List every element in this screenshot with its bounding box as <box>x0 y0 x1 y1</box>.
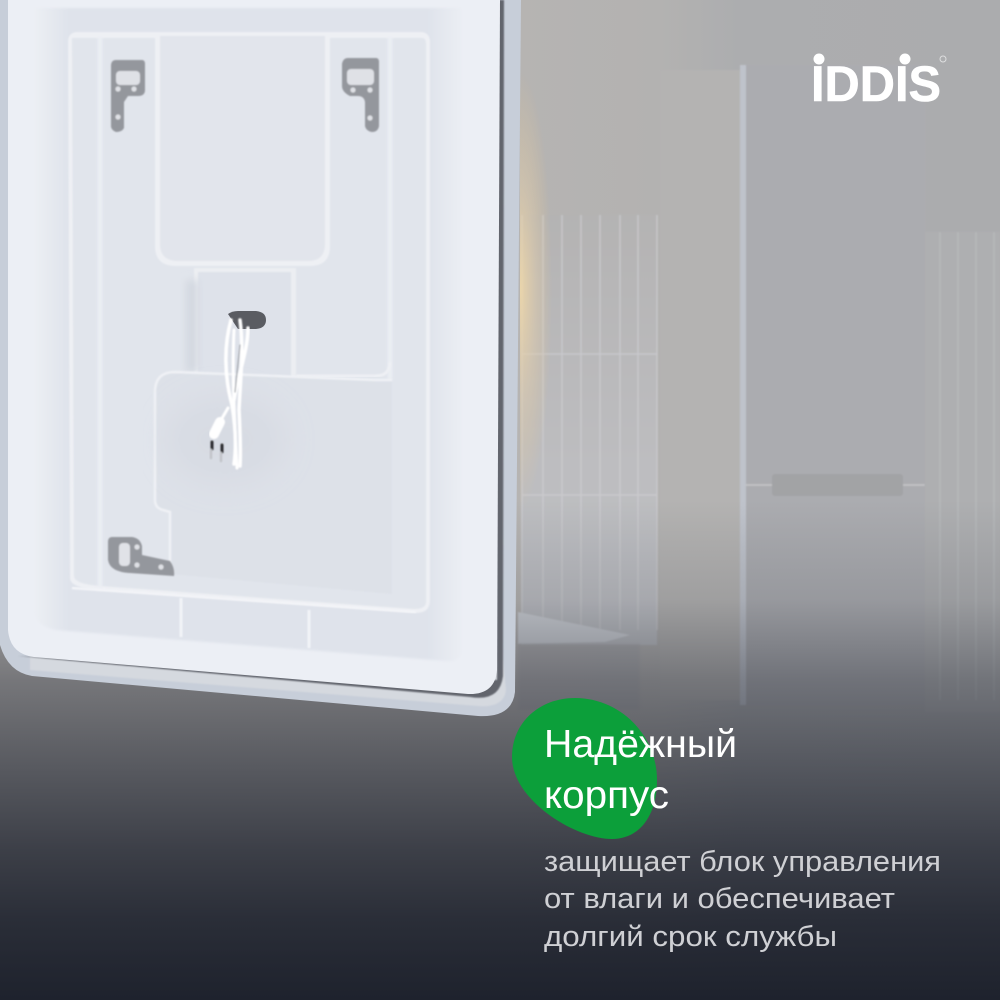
heading: Надёжный <box>544 723 737 766</box>
recess <box>34 8 462 661</box>
power cable and plug <box>211 320 248 468</box>
wall tiles right <box>925 232 1000 712</box>
lower panel shelf <box>72 588 416 612</box>
warm light glow behind mirror <box>520 70 552 510</box>
description text <box>544 846 941 953</box>
cable channel <box>186 268 296 378</box>
bracket top right <box>342 58 379 132</box>
basin counter <box>518 612 630 644</box>
heading <box>544 723 737 817</box>
cable slot <box>228 311 266 329</box>
logo: iddis: IDDIS <box>811 56 941 112</box>
right stepped edge <box>296 362 390 376</box>
green blob <box>512 698 657 839</box>
bracket top left <box>111 60 145 132</box>
mirror back view <box>0 0 521 716</box>
heading: корпус <box>544 774 669 817</box>
back panel <box>68 32 430 613</box>
description text: защищает блок управления <box>544 846 941 878</box>
dark seal line <box>18 0 504 698</box>
wall tiles left <box>521 215 657 645</box>
tall cabinet <box>660 65 925 705</box>
bracket bottom left <box>108 537 174 576</box>
mirror body <box>8 0 500 694</box>
centre cover <box>155 36 330 266</box>
bottom ribs <box>181 598 309 648</box>
description text: от влаги и обеспечивает <box>544 883 895 915</box>
description text: долгий срок службы <box>544 921 837 953</box>
lower cover <box>155 372 392 594</box>
mirror outer frame <box>0 0 521 716</box>
